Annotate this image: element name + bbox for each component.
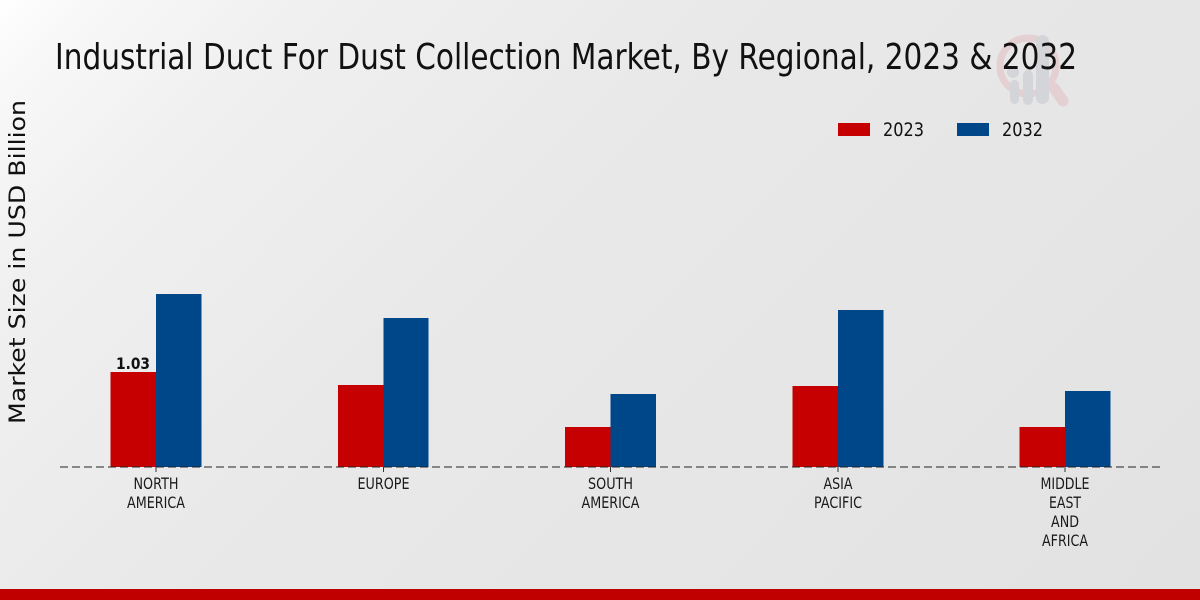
bars: North America xyxy=(110,294,202,467)
axis label: Middle East and Africa: MIDDLE xyxy=(1040,474,1090,493)
legend item: 2023 xyxy=(838,119,924,141)
bars: Europe xyxy=(338,318,428,467)
bar chart xyxy=(60,294,1160,472)
bars: Middle East and Africa xyxy=(1020,391,1110,467)
footer bar xyxy=(0,589,1200,600)
y-axis label: Market Size in USD Billion xyxy=(5,100,31,424)
axis label: North America: AMERICA xyxy=(127,493,185,512)
axis label: North America: NORTH xyxy=(134,474,178,493)
icon: watermark magnifier logo xyxy=(1000,35,1063,105)
axis label: Europe: EUROPE xyxy=(358,474,410,493)
axis label: Middle East and Africa: AND xyxy=(1051,512,1079,531)
legend item: 2023: 2023 xyxy=(883,119,924,141)
bars: Asia Pacific xyxy=(792,310,884,467)
bars: South America xyxy=(565,394,656,467)
legend item: 2032 xyxy=(957,119,1043,141)
axis label: Middle East and Africa: EAST xyxy=(1049,493,1081,512)
axis label: South America: SOUTH xyxy=(588,474,633,493)
legend item: 2032: 2032 xyxy=(1002,119,1043,141)
axis label: Middle East and Africa: AFRICA xyxy=(1042,531,1088,550)
legend xyxy=(838,119,1043,141)
value label: 1.03: 1.03 xyxy=(116,354,150,373)
axis label: Asia Pacific: ASIA xyxy=(824,474,853,493)
axis label: South America: AMERICA xyxy=(582,493,640,512)
axis label: Asia Pacific: PACIFIC xyxy=(814,493,862,512)
